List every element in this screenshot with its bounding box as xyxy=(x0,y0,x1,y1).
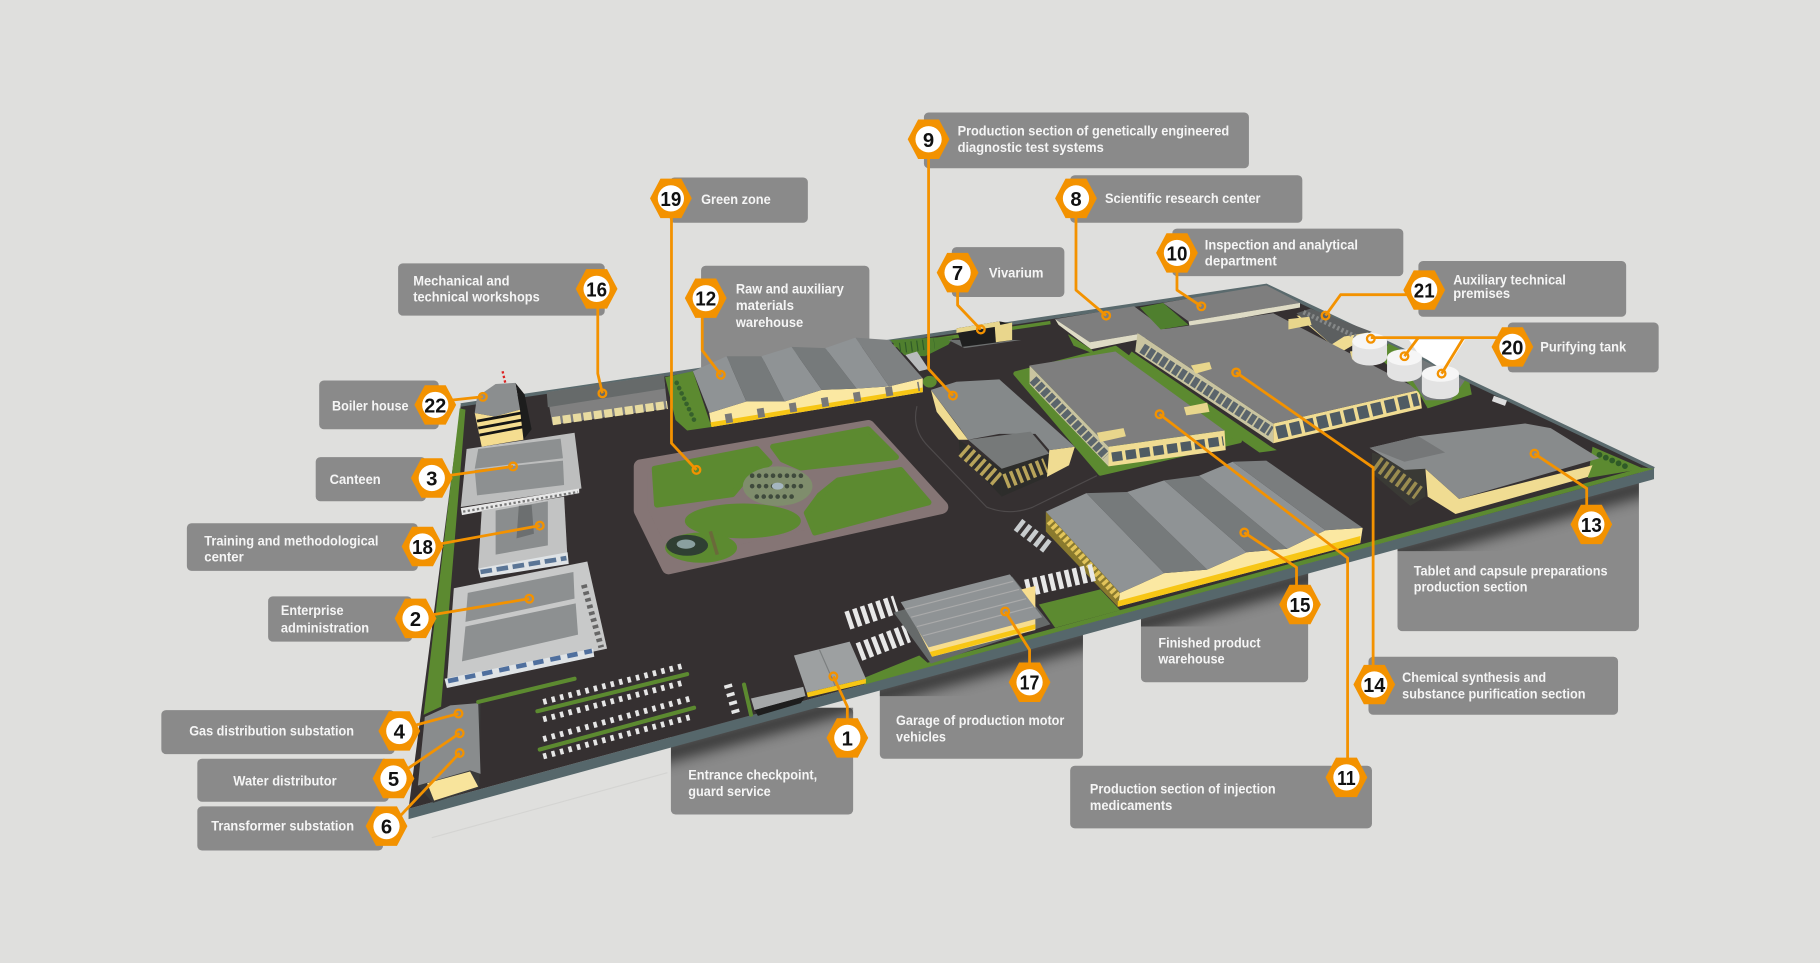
label: inspection department xyxy=(1172,229,1403,276)
label: chemical synthesis section xyxy=(1368,657,1618,715)
building: genetic diagnostics section xyxy=(916,379,1097,512)
label: entrance checkpoint: guard service xyxy=(688,783,771,799)
marker 11 xyxy=(1156,410,1367,797)
label: inspection department: Inspection and analytical xyxy=(1205,236,1358,252)
building: raw materials warehouse xyxy=(665,336,954,430)
marker 3 xyxy=(411,458,517,498)
label: tablet and capsule section xyxy=(1398,470,1639,631)
marker 5 xyxy=(373,729,463,798)
building: inspection department xyxy=(1140,285,1300,330)
label: training center xyxy=(187,523,418,571)
building: training center xyxy=(478,497,569,578)
marker 1: 1 xyxy=(842,728,853,750)
label: auxiliary technical premises: Auxiliary technical xyxy=(1453,271,1566,287)
building: research center xyxy=(1055,306,1165,355)
marker 20 xyxy=(1367,327,1533,377)
label: garage xyxy=(880,615,1083,759)
label: mechanical workshops xyxy=(398,263,605,316)
label: green zone xyxy=(670,178,808,223)
marker 4 xyxy=(378,710,462,751)
marker 8: 8 xyxy=(1070,189,1082,211)
marker 21 xyxy=(1322,270,1445,319)
marker 15: 15 xyxy=(1290,595,1310,617)
marker 13 xyxy=(1531,450,1612,544)
label: auxiliary technical premises: premises xyxy=(1453,285,1510,301)
label: green zone: Green zone xyxy=(701,191,771,207)
marker 7: 7 xyxy=(952,263,963,285)
label: raw materials warehouse: materials xyxy=(736,297,794,313)
ground slab xyxy=(409,285,1654,819)
marker 3: 3 xyxy=(426,469,437,491)
marker 18: 18 xyxy=(412,537,433,559)
label: finished product warehouse: Finished product xyxy=(1158,634,1261,650)
marker 21: 21 xyxy=(1414,281,1435,303)
label: inspection department: department xyxy=(1205,253,1277,269)
label: tablet and capsule section: Tablet and capsule preparations xyxy=(1414,562,1608,578)
marker 18 xyxy=(402,522,544,566)
building: workshops xyxy=(547,375,667,425)
marker 22 xyxy=(414,385,487,425)
label: gas distribution: Gas distribution substation xyxy=(189,723,354,739)
marker 16: 16 xyxy=(586,279,607,301)
building: vivarium xyxy=(948,321,1021,348)
label: canteen xyxy=(316,457,426,501)
building: substations 4, 5, 6 xyxy=(418,703,481,803)
label: vivarium: Vivarium xyxy=(989,264,1043,280)
marker 6 xyxy=(366,749,463,846)
building: enterprise administration xyxy=(445,562,607,688)
label: enterprise administration xyxy=(268,596,412,642)
label: purifying tank: Purifying tank xyxy=(1540,339,1626,355)
label: scientific research center xyxy=(1070,175,1302,223)
white gap and purifying tanks xyxy=(1352,333,1507,408)
marker 9 xyxy=(908,120,957,399)
marker 14: 14 xyxy=(1363,675,1386,697)
label: entrance checkpoint: Entrance checkpoint, xyxy=(688,767,817,783)
building: injection medicaments section xyxy=(1016,348,1240,473)
marker 15 xyxy=(1240,529,1321,624)
building: chemical synthesis section xyxy=(1126,313,1422,452)
marker 19 xyxy=(650,179,700,474)
marker 1 xyxy=(826,673,868,758)
marker 11: 11 xyxy=(1337,768,1356,790)
label: mechanical workshops: technical workshops xyxy=(413,289,540,305)
marker 2 xyxy=(395,595,533,638)
site plan: aerial view of the plant xyxy=(409,285,1654,838)
label: training center: Training and methodological xyxy=(204,532,378,548)
label: training center: center xyxy=(204,549,244,565)
marker 22: 22 xyxy=(424,395,446,417)
marker 6: 6 xyxy=(381,817,392,839)
label: chemical synthesis section: substance purification section xyxy=(1402,685,1586,701)
label: tablet and capsule section: production section xyxy=(1414,579,1527,595)
marker 5: 5 xyxy=(388,769,399,791)
label: scientific research center: Scientific research center xyxy=(1105,190,1261,206)
label: injection medicaments section: Production section of injection xyxy=(1090,781,1276,797)
marker 10: 10 xyxy=(1167,243,1187,265)
building: entrance checkpoint xyxy=(751,642,866,716)
label: boiler house xyxy=(319,381,439,429)
label: injection medicaments section xyxy=(1070,766,1372,828)
marker 14 xyxy=(1232,369,1395,704)
label: genetically engineered section: Production section of genetically engineered xyxy=(958,123,1229,139)
label: mechanical workshops: Mechanical and xyxy=(413,272,510,288)
label: raw materials warehouse xyxy=(701,266,869,371)
building: garage xyxy=(894,574,1050,664)
marker 2: 2 xyxy=(410,609,421,631)
building: boiler house xyxy=(475,371,532,447)
label: boiler house: Boiler house xyxy=(332,398,409,414)
label: garage: vehicles xyxy=(896,728,946,744)
label: genetically engineered section: diagnostic test systems xyxy=(958,139,1104,155)
label: canteen: Canteen xyxy=(330,471,381,487)
label: genetically engineered section xyxy=(924,113,1249,168)
label: raw materials warehouse: Raw and auxiliary xyxy=(736,281,844,297)
marker 13: 13 xyxy=(1581,515,1602,537)
label: garage: Garage of production motor xyxy=(896,712,1065,728)
trucks xyxy=(847,524,1096,652)
label: auxiliary technical premises xyxy=(1418,261,1626,317)
building: canteen xyxy=(461,433,582,515)
building: tablet and capsule section xyxy=(1370,423,1599,514)
label: enterprise administration: administration xyxy=(281,619,369,635)
label: enterprise administration: Enterprise xyxy=(281,602,344,618)
label: finished product warehouse: warehouse xyxy=(1157,651,1225,667)
parking rows xyxy=(478,666,751,756)
label: vivarium xyxy=(952,247,1064,297)
label: chemical synthesis section: Chemical synthesis and xyxy=(1402,669,1546,685)
label: purifying tank xyxy=(1508,323,1659,372)
label: water distributor xyxy=(197,759,389,802)
label: transformer substation: Transformer substation xyxy=(211,818,354,834)
marker 20: 20 xyxy=(1501,337,1523,359)
label: transformer substation xyxy=(197,806,383,850)
label: injection medicaments section: medicaments xyxy=(1090,797,1172,813)
marker 9: 9 xyxy=(923,130,934,152)
marker 19: 19 xyxy=(660,189,681,211)
marker 17 xyxy=(1001,608,1050,702)
label: raw materials warehouse: warehouse xyxy=(735,314,803,330)
marker 8 xyxy=(1055,179,1110,319)
marker 10 xyxy=(1156,233,1205,310)
label: finished product warehouse xyxy=(1141,545,1308,682)
marker 4: 4 xyxy=(394,721,406,743)
building: finished product warehouse xyxy=(1046,461,1363,607)
marker 7 xyxy=(937,253,985,333)
label: entrance checkpoint xyxy=(671,708,853,814)
marker 12: 12 xyxy=(695,289,716,311)
label: gas distribution xyxy=(161,710,395,754)
building: auxiliary premises xyxy=(1297,309,1372,350)
green zone plaza xyxy=(641,427,941,567)
marker 17: 17 xyxy=(1020,673,1039,695)
label: water distributor: Water distributor xyxy=(233,772,337,788)
marker 12 xyxy=(685,278,727,379)
marker 16 xyxy=(576,269,618,397)
